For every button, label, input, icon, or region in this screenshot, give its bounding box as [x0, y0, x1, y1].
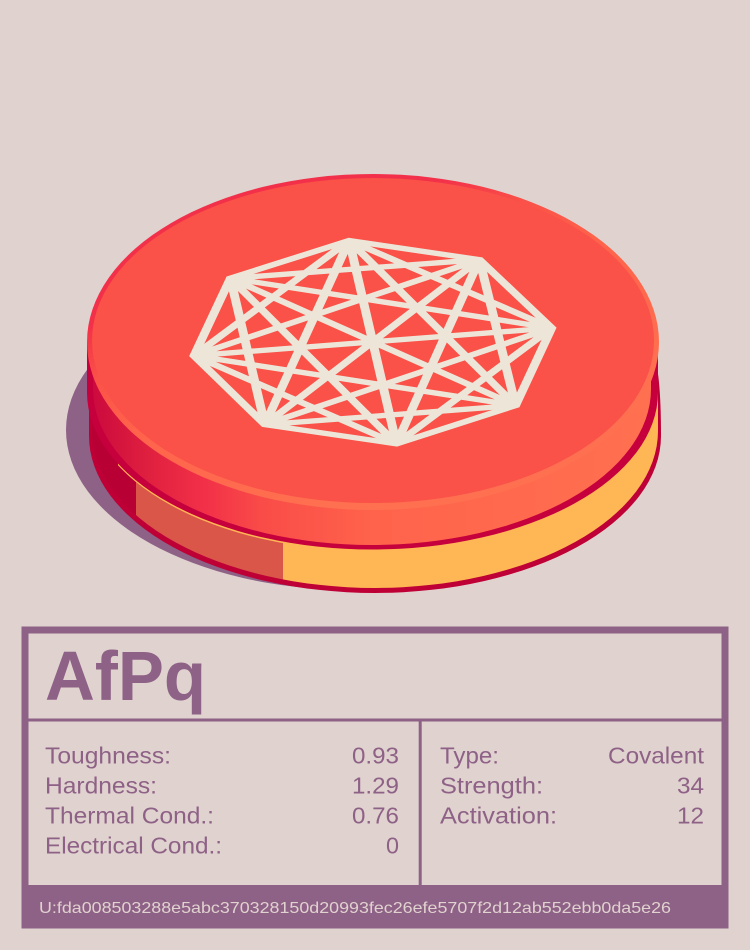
- left properties: 0.76: [352, 802, 399, 828]
- left properties: Toughness:: [45, 742, 171, 768]
- top face: [92, 178, 654, 503]
- info panel: [22, 630, 728, 928]
- left properties: Hardness:: [45, 772, 157, 798]
- title: AfPq: [45, 637, 206, 715]
- panel frame: [25, 630, 725, 925]
- disc shadow: [66, 270, 638, 590]
- left properties: 1.29: [352, 772, 399, 798]
- right properties: Strength:: [440, 772, 543, 798]
- left properties: [45, 742, 399, 858]
- right properties: [440, 742, 704, 828]
- title divider: [25, 718, 725, 722]
- right properties: Covalent: [608, 742, 704, 768]
- top face rim: [87, 174, 659, 510]
- lower tier band: crimson, salmon and yellow sections: [92, 372, 658, 588]
- disc illustration: [66, 174, 661, 593]
- left properties: 0.93: [352, 742, 399, 768]
- right properties: 34: [677, 772, 704, 798]
- upper tier side wall: [93, 342, 651, 545]
- right properties: 12: [677, 802, 704, 828]
- left properties: 0: [386, 832, 399, 858]
- column divider: [419, 720, 422, 886]
- lower tier dark base: [89, 362, 661, 593]
- left properties: Electrical Cond.:: [45, 832, 222, 858]
- right properties: Type:: [440, 742, 499, 768]
- left properties: Thermal Cond.:: [45, 802, 214, 828]
- right properties: Activation:: [440, 802, 557, 828]
- upper tier dark edge: [87, 342, 658, 550]
- footer bar: [22, 885, 728, 928]
- footer hash: U:fda008503288e5abc370328150d20993fec26efe5707f2d12ab552ebb0da5e26: [39, 900, 671, 917]
- icon: bond network octagon: [194, 241, 552, 444]
- thin yellow line under upper tier: [118, 464, 283, 544]
